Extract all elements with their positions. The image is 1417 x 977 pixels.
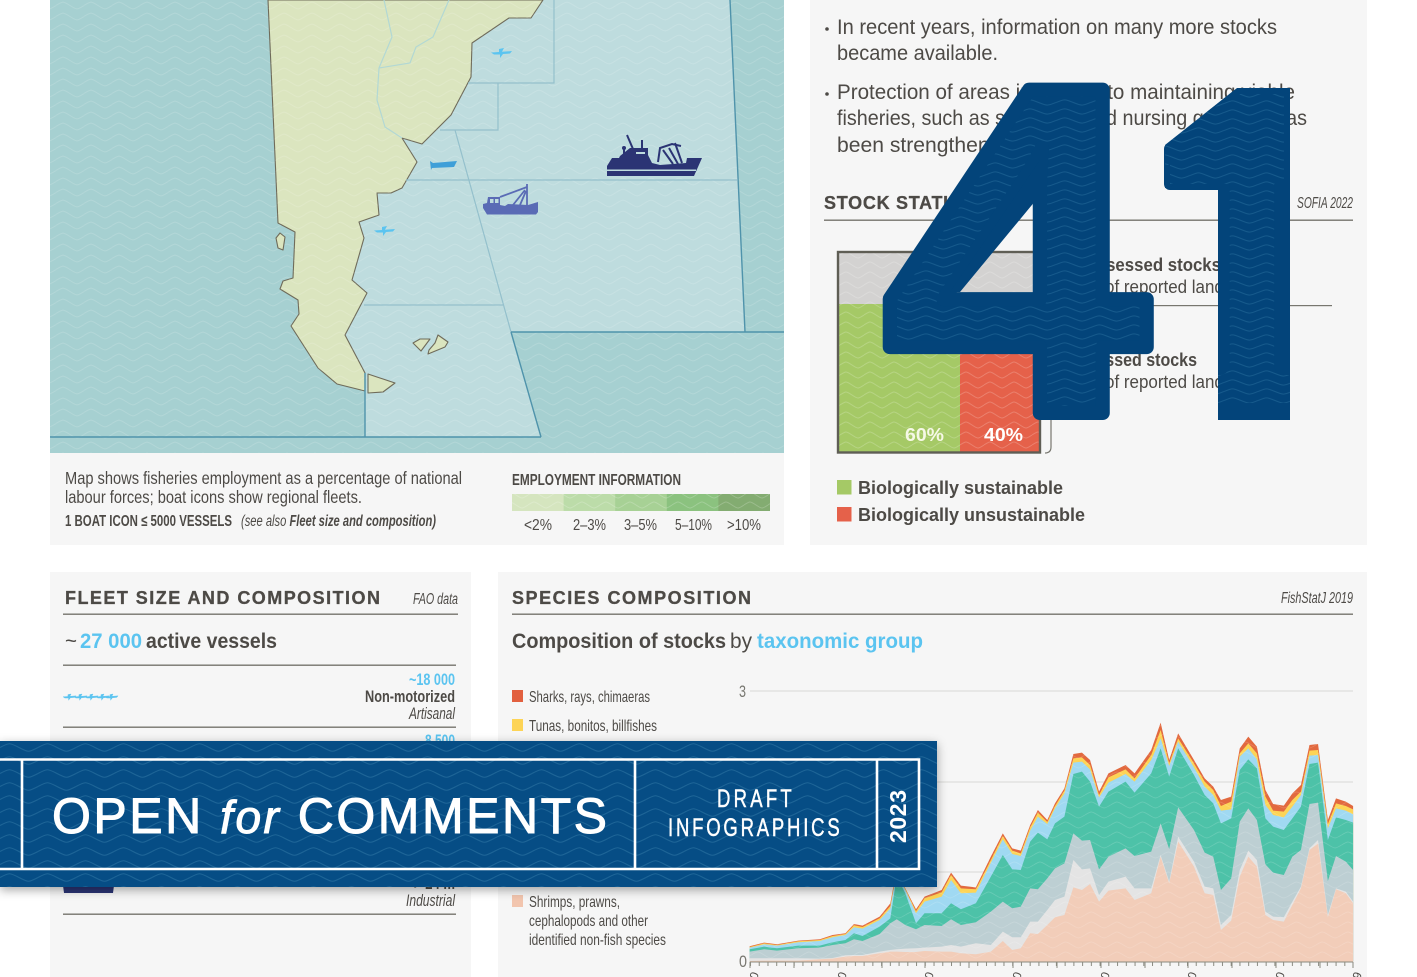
chart legend: Sharks, rays, chimaeras [529,689,650,706]
fleet row: industrial: > 24 m [414,875,455,893]
chart labels: Unassessed stocks [1065,255,1221,275]
stacked areas [750,723,1353,962]
chart labels: of reported landings [1105,372,1255,392]
banner frame [0,760,919,869]
bullet text: Protection of areas important to maintaining viable [837,81,1295,104]
heading: stock status: STOCK STATUS [824,193,969,213]
chart labels [1040,255,1332,392]
panel: stock status [810,0,1367,545]
fleet row: motorized count: 8 500 [425,732,455,750]
digit one [1164,88,1290,420]
banner subtitle: INFOGRAPHICS [668,813,840,842]
chart: stock status proportions: 60% [905,425,944,445]
caption text: labour forces; boat icons show regional fleets. [65,487,362,507]
heading: fleet [63,588,458,615]
chart title [512,630,923,653]
fleet row: non-motorized [63,671,456,728]
chart legend: Shrimps, prawns, [529,894,620,911]
chart legend [512,689,666,949]
fleet total: active vessels [146,630,277,653]
bullet text: been strengthened. [837,134,1019,157]
heading: fleet: FLEET SIZE AND COMPOSITION [65,588,380,608]
digit one: 1 [1110,0,1371,513]
chart: stock status proportions: 40% [984,425,1023,445]
chart title: Composition of stocks [512,630,726,653]
caption text: Map shows fisheries employment as a percentage of national [65,468,462,488]
banner title: OPEN for COMMENTS [52,788,607,844]
bullet text: became available. [837,42,998,65]
chart labels: Assessed stocks [1067,350,1197,370]
trawler stripe [607,170,696,171]
legend: employment information [512,472,770,534]
caption text: 1 BOAT ICON ≤ 5000 VESSELS [65,513,232,530]
boundary lines [50,0,784,437]
legend: sustainability: Biologically unsustainable [858,504,1085,525]
country borders inland [377,0,449,138]
fleet row: non-motorized: ~18 000 [409,671,455,689]
icon: rowboat south [374,226,395,236]
icon: row of small boats [63,694,118,700]
legend: employment information: 2–3% [573,517,606,534]
chart title: by [730,630,752,653]
banner: open for comments [0,741,937,887]
chart legend: identified non-fish species [529,932,666,949]
chart legend: Tunas, bonitos, billfishes [529,718,657,735]
panel: fleet size and composition [50,572,471,977]
legend: employment information: 5–10% [675,517,712,534]
caption text [65,468,462,530]
legend: employment information: EMPLOYMENT INFORMATION [512,472,681,489]
four counter adjustment [950,160,1040,292]
heading: species [512,588,1353,615]
chart title: taxonomic group [757,630,923,653]
banner year: 2023 [885,790,911,843]
fleet total: ~ [65,630,77,653]
legend: sustainability: Biologically sustainable [858,477,1063,498]
land: South America [268,0,543,393]
fleet row: industrial [62,875,456,915]
heading: stock status: SOFIA 2022 [1297,195,1353,212]
fleet row: non-motorized: Artisanal [408,705,456,723]
caption text: (see also Fleet size and composition) [241,513,436,530]
bullet text: In recent years, information on many more stocks [837,16,1277,39]
panel: species composition [498,572,1367,977]
chart labels: of reported landings [1105,277,1255,297]
icon: large trawler [607,135,702,176]
legend: sustainability [837,477,1085,525]
bullet text: fisheries, such as spawning and nursing grounds, has [837,107,1307,130]
icon: medium fishing boat [483,184,538,214]
icon: industrial vessel [62,878,115,893]
bullet text [825,16,1307,157]
heading: stock status [824,193,1353,221]
panel: map [50,0,784,453]
fleet total [63,630,456,666]
stacked area chart: 3 [739,682,746,701]
fleet row: industrial: Industrial [406,892,456,910]
heading: species: SPECIES COMPOSITION [512,588,751,608]
page number: 41 [882,82,1290,420]
heading: species: FishStatJ 2019 [1281,590,1353,607]
banner subtitle: DRAFT [717,784,792,813]
heading: fleet: FAO data [413,591,458,608]
land texture [268,0,543,391]
legend: employment information: >10% [727,517,761,534]
chart: stock status proportions [838,252,1051,453]
panel: map caption [50,453,784,545]
legend: employment information: <2% [524,517,552,534]
fleet row: non-motorized: Non-motorized [365,688,455,706]
banner subtitle [668,784,840,842]
EEZ inner lines [364,0,737,332]
sea regions [345,0,745,437]
x axis [740,962,1365,977]
stacked area chart [739,682,1365,977]
legend: employment information: 3–5% [624,517,657,534]
page number: 41: 4 [883,0,1152,513]
icon: small motor boat [430,161,457,170]
icon: rowboat north [491,48,512,58]
stacked area chart: 0 [739,952,747,971]
chart legend: cephalopods and other [529,913,648,930]
fleet total: 27 000 [80,630,142,653]
